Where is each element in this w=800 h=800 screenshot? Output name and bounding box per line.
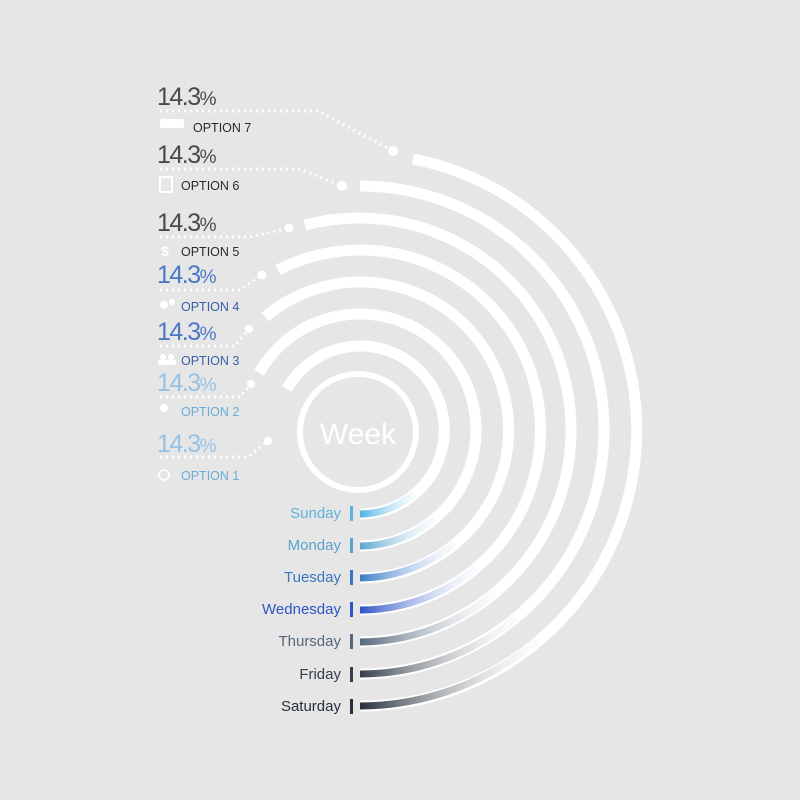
percentages: 14.3% [157, 141, 217, 169]
day labels: Wednesday [262, 601, 341, 618]
percentages: 14.3% [157, 83, 217, 111]
option labels: OPTION 3 [181, 354, 239, 368]
percentages: 14.3% [157, 209, 217, 237]
option labels: OPTION 6 [181, 179, 239, 193]
concentric arcs [259, 159, 637, 706]
percentages: 14.3% [157, 261, 217, 289]
percentages: 14.3% [157, 369, 217, 397]
percentages [157, 83, 217, 458]
week circle: Week [320, 418, 397, 451]
percentages: 14.3% [157, 430, 217, 458]
dotted connectors [160, 111, 393, 457]
option labels [181, 121, 251, 483]
colored day arc ends [360, 494, 537, 706]
day labels: Monday [288, 537, 341, 554]
connector dots [245, 146, 398, 445]
percentages: 14.3% [157, 318, 217, 346]
option labels: OPTION 1 [181, 469, 239, 483]
option labels: OPTION 5 [181, 245, 239, 259]
option icons: $ [161, 243, 169, 259]
day labels: Saturday [281, 698, 341, 715]
option labels: OPTION 7 [193, 121, 251, 135]
option icons [158, 119, 184, 480]
option labels: OPTION 2 [181, 405, 239, 419]
day labels: Tuesday [284, 569, 341, 586]
day labels [262, 505, 353, 715]
day labels: Sunday [290, 505, 341, 522]
week circle [300, 374, 416, 490]
day labels: Thursday [278, 633, 341, 650]
day labels: Friday [299, 666, 341, 683]
option labels: OPTION 4 [181, 300, 239, 314]
